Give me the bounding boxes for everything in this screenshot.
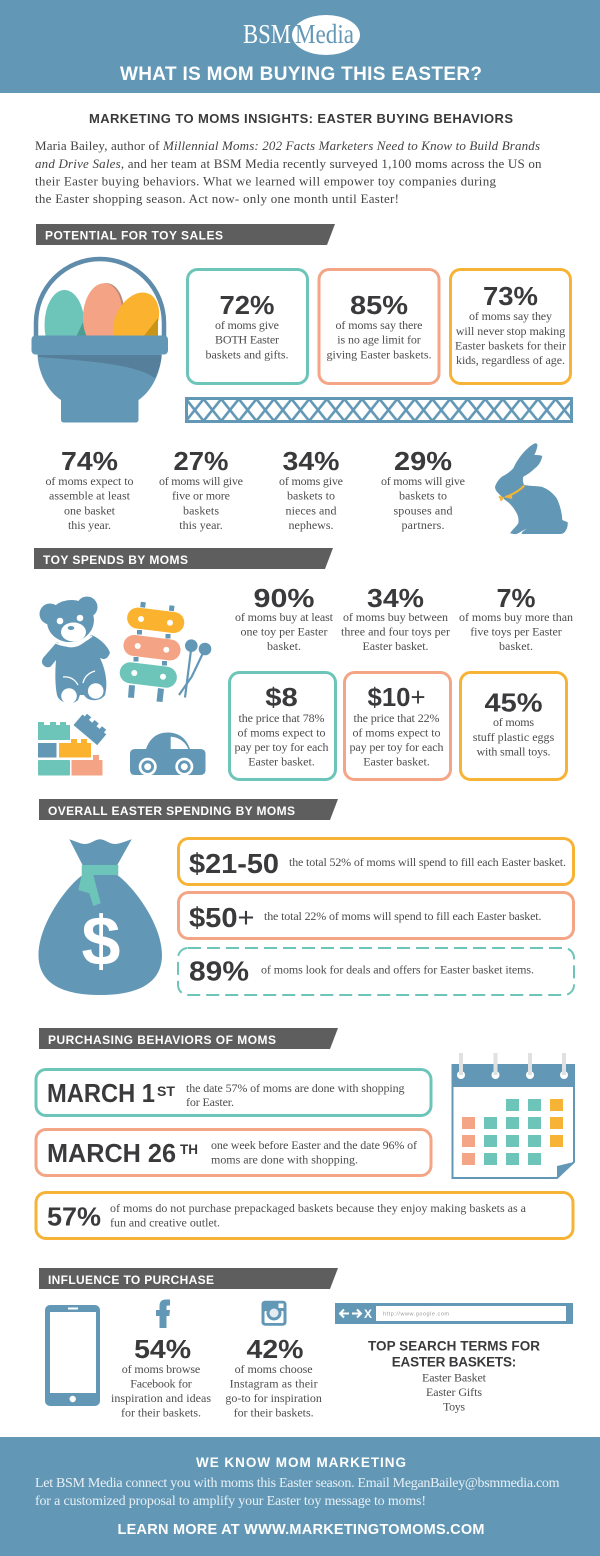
stat card: 57%: fun and creative outlet. xyxy=(110,1216,220,1230)
section heading: purchasing behaviors: PURCHASING BEHAVIORS OF MOMS xyxy=(48,1033,276,1047)
stat card: 72% xyxy=(188,270,308,384)
stat: 42% instagram: Instagram as their xyxy=(230,1377,318,1391)
intro paragraph: their Easter buying behaviors. What we learned will empower toy companies during xyxy=(35,174,496,188)
intro paragraph: Maria Bailey, author of Millennial Moms: 202 Facts Marketers Need to Know to Build Brands xyxy=(35,138,540,153)
logo: BSM Media: Media xyxy=(295,19,354,49)
stat: 34%: 34% xyxy=(367,583,424,613)
stat: 42% instagram: of moms choose xyxy=(235,1362,313,1376)
stat: 29%: of moms will give xyxy=(381,474,465,488)
stat: 90% xyxy=(235,583,334,653)
title: WHAT IS MOM BUYING THIS EASTER? xyxy=(120,64,482,85)
date card: March 26th: MARCH 26 xyxy=(47,1138,176,1168)
price card: $10+ xyxy=(344,672,450,780)
section heading: purchasing behaviors xyxy=(39,1028,338,1049)
stat: 7%: basket. xyxy=(499,639,533,653)
stat: 34% xyxy=(279,446,343,532)
icon: browser bar xyxy=(335,1303,573,1324)
stat: 74%: 74% xyxy=(61,446,118,476)
stat card: 72%: baskets and gifts. xyxy=(206,347,288,361)
stat: 74%: assemble at least xyxy=(49,489,131,503)
stat: 90%: of moms buy at least xyxy=(235,610,334,624)
stat: 34%: baskets to xyxy=(287,489,335,503)
deals card: 89%: of moms look for deals and offers for Easter basket items. xyxy=(261,963,534,977)
stat: 54% facebook: inspiration and ideas xyxy=(111,1391,211,1405)
stat: 74% xyxy=(46,446,134,532)
stat: 34%: three and four toys per xyxy=(341,625,450,639)
stat: 90%: one toy per Easter xyxy=(240,625,328,639)
stat: 90%: basket. xyxy=(267,639,301,653)
subheading: MARKETING TO MOMS INSIGHTS: EASTER BUYING BEHAVIORS xyxy=(89,111,513,126)
date card: March 26th: one week before Easter and the date 96% of xyxy=(211,1138,417,1152)
section heading: potential for toy sales xyxy=(36,224,335,245)
date card: March 26th: TH xyxy=(180,1141,198,1157)
section heading: toy spends by moms xyxy=(34,548,333,569)
stat card: 72%: of moms give xyxy=(215,318,279,332)
stat: 27%: five or more xyxy=(172,489,230,503)
stat card: 73%: of moms say they xyxy=(469,309,552,323)
stat card: 72%: 72% xyxy=(220,290,274,320)
stat: 54% facebook: 54% xyxy=(134,1334,191,1364)
stat: 42% instagram: 42% xyxy=(246,1334,304,1364)
icon: money bag: $ xyxy=(82,902,120,980)
stat card: 45%: with small toys. xyxy=(476,745,550,759)
icon: smartphone xyxy=(45,1305,100,1406)
stat: 29%: 29% xyxy=(394,446,452,476)
stat: 34%: of moms buy between xyxy=(343,610,448,624)
spend card: $21-50 xyxy=(178,838,574,884)
stat card: 73%: 73% xyxy=(483,281,538,311)
deals card: 89%: 89% xyxy=(189,956,249,987)
stat card: 72%: BOTH Easter xyxy=(215,333,279,347)
price card: $8: of moms expect to xyxy=(238,726,326,740)
icon: browser bar: http://www.google.com xyxy=(383,1312,449,1318)
stat: 29% xyxy=(381,446,465,532)
price card: $8: pay per toy for each xyxy=(234,740,328,754)
spend card: $21-50: $21-50 xyxy=(189,848,279,879)
icon: xylophone with mallets xyxy=(119,602,211,702)
section heading: overall easter spending: OVERALL EASTER SPENDING BY MOMS xyxy=(48,804,295,818)
logo: BSM Media xyxy=(243,15,360,55)
icon: toy car xyxy=(130,732,206,776)
stat: 74%: this year. xyxy=(68,518,111,532)
logo: BSM Media: BSM xyxy=(243,19,291,49)
stat: 34%: nieces and xyxy=(286,503,336,517)
stat: 34%: of moms give xyxy=(279,474,343,488)
date card: March 1st: the date 57% of moms are done with shopping xyxy=(186,1081,404,1095)
stat card: 45%: of moms xyxy=(493,715,534,729)
stat: 42% instagram: go-to for inspiration xyxy=(225,1391,322,1405)
section heading: influence to purchase: INFLUENCE TO PURCHASE xyxy=(48,1273,214,1287)
icon: money bag xyxy=(38,839,162,995)
price card: $10+: of moms expect to xyxy=(352,726,440,740)
intro paragraph xyxy=(35,138,542,206)
price card: $10+: the price that 22% xyxy=(354,711,440,725)
stat: 54% facebook xyxy=(111,1334,211,1420)
stat: 34%: nephews. xyxy=(288,518,334,532)
date card: March 1st: for Easter. xyxy=(186,1095,234,1109)
stat: 34%: 34% xyxy=(282,446,340,476)
spend card: $50+ xyxy=(178,892,574,938)
stat: 74%: one basket xyxy=(64,503,116,517)
date card: March 26th: moms are done with shopping. xyxy=(211,1153,358,1167)
stat card: 45%: stuff plastic eggs xyxy=(473,730,555,744)
spend card: $50+: $50+ xyxy=(189,902,254,933)
spend card: $50+: the total 22% of moms will spend to fill each Easter basket. xyxy=(264,909,542,923)
footer text: for a customized proposal to amplify your Easter toy message to moms! xyxy=(35,1494,426,1509)
stat card: 73%: Easter baskets for their xyxy=(455,338,566,352)
stat: 54% facebook: of moms browse xyxy=(122,1362,200,1376)
intro paragraph: the Easter shopping season. Act now- only one month until Easter! xyxy=(35,191,399,206)
stat card: 57% xyxy=(36,1192,573,1238)
header banner xyxy=(0,0,600,93)
top search terms xyxy=(368,1339,540,1414)
section heading: influence to purchase xyxy=(39,1268,338,1289)
icon: browser bar: X xyxy=(364,1307,372,1321)
stat card: 57%: 57% xyxy=(47,1202,101,1232)
stat card: 73% xyxy=(450,270,570,384)
stat: 27%: 27% xyxy=(174,446,228,476)
top search terms: TOP SEARCH TERMS FOR xyxy=(368,1339,540,1354)
stat: 7%: 7% xyxy=(496,583,536,613)
footer text: Let BSM Media connect you with moms this Easter season. Email MeganBailey@bsmmedia.com xyxy=(35,1476,560,1491)
price card: $8: $8 xyxy=(265,682,298,712)
date card: March 26th xyxy=(36,1130,431,1176)
stat card: 57%: of moms do not purchase prepackaged baskets because they enjoy making baskets as a xyxy=(110,1201,527,1215)
footer heading: WE KNOW MOM MARKETING xyxy=(196,1455,406,1470)
stat: 27%: this year. xyxy=(179,518,223,532)
icon: facebook xyxy=(156,1300,170,1328)
stat card: 73%: will never stop making xyxy=(456,324,565,338)
stat card: 85%: is no age limit for xyxy=(337,333,421,347)
price card: $10+: pay per toy for each xyxy=(350,740,444,754)
stat: 54% facebook: Facebook for xyxy=(130,1377,192,1391)
stat: 34% xyxy=(341,583,450,653)
stat: 54% facebook: for their baskets. xyxy=(121,1406,201,1420)
stat: 27%: of moms will give xyxy=(159,474,243,488)
stat: 29%: baskets to xyxy=(399,489,447,503)
deals card: 89% xyxy=(178,948,574,995)
stat: 27%: baskets xyxy=(183,503,219,517)
price card: $8: Easter basket. xyxy=(248,755,315,769)
icon: calendar xyxy=(452,1053,575,1179)
stat card: 85% xyxy=(319,270,439,384)
icon: toy blocks xyxy=(38,712,108,776)
stat: 7%: of moms buy more than xyxy=(459,610,573,624)
stat: 74%: of moms expect to xyxy=(46,474,134,488)
icon: easter basket with eggs xyxy=(32,259,168,422)
section heading: overall easter spending xyxy=(39,799,338,820)
stat card: 45% xyxy=(460,672,566,780)
stat: 7%: five toys per Easter xyxy=(470,625,562,639)
stat card: 85%: of moms say there xyxy=(336,318,422,332)
stat card: 45%: 45% xyxy=(484,688,542,718)
stat: 42% instagram xyxy=(225,1334,322,1420)
stat: 90%: 90% xyxy=(254,583,314,613)
stat: 34%: Easter basket. xyxy=(362,639,428,653)
footer text xyxy=(35,1476,560,1509)
section heading: toy spends by moms: TOY SPENDS BY MOMS xyxy=(43,553,188,567)
price card: $10+: Easter basket. xyxy=(363,755,430,769)
section heading: potential for toy sales: POTENTIAL FOR TOY SALES xyxy=(45,228,223,242)
stat card: 73%: kids, regardless of age. xyxy=(456,353,565,367)
footer banner xyxy=(0,1437,600,1556)
stat: 29%: spouses and xyxy=(394,503,452,517)
footer call to action: LEARN MORE AT WWW.MARKETINGTOMOMS.COM xyxy=(118,1522,484,1538)
stat: 7% xyxy=(459,583,573,653)
top search terms: Easter Basket xyxy=(422,1371,487,1385)
stat card: 85%: 85% xyxy=(350,290,408,320)
top search terms: Easter Gifts xyxy=(426,1385,482,1399)
price card: $8 xyxy=(230,672,336,780)
basket weave lattice band xyxy=(186,398,572,422)
top search terms: EASTER BASKETS: xyxy=(392,1355,516,1370)
stat: 29%: partners. xyxy=(402,518,444,532)
top search terms: Toys xyxy=(443,1400,465,1414)
price card: $8: the price that 78% xyxy=(238,711,324,725)
date card: March 1st xyxy=(36,1070,431,1116)
price card: $10+: $10+ xyxy=(368,682,426,712)
stat: 27% xyxy=(159,446,243,532)
date card: March 1st: ST xyxy=(157,1083,175,1099)
spend card: $21-50: the total 52% of moms will spend to fill each Easter basket. xyxy=(289,855,566,869)
stat: 42% instagram: for their baskets. xyxy=(234,1406,314,1420)
stat card: 85%: giving Easter baskets. xyxy=(326,347,432,361)
icon: teddy bear xyxy=(40,596,110,704)
icon: rabbit with bow xyxy=(495,443,568,534)
icon: instagram xyxy=(262,1301,286,1326)
date card: March 1st: MARCH 1 xyxy=(47,1078,155,1108)
intro paragraph: and Drive Sales, and her team at BSM Media recently surveyed 1,100 moms across the US on xyxy=(35,156,542,171)
